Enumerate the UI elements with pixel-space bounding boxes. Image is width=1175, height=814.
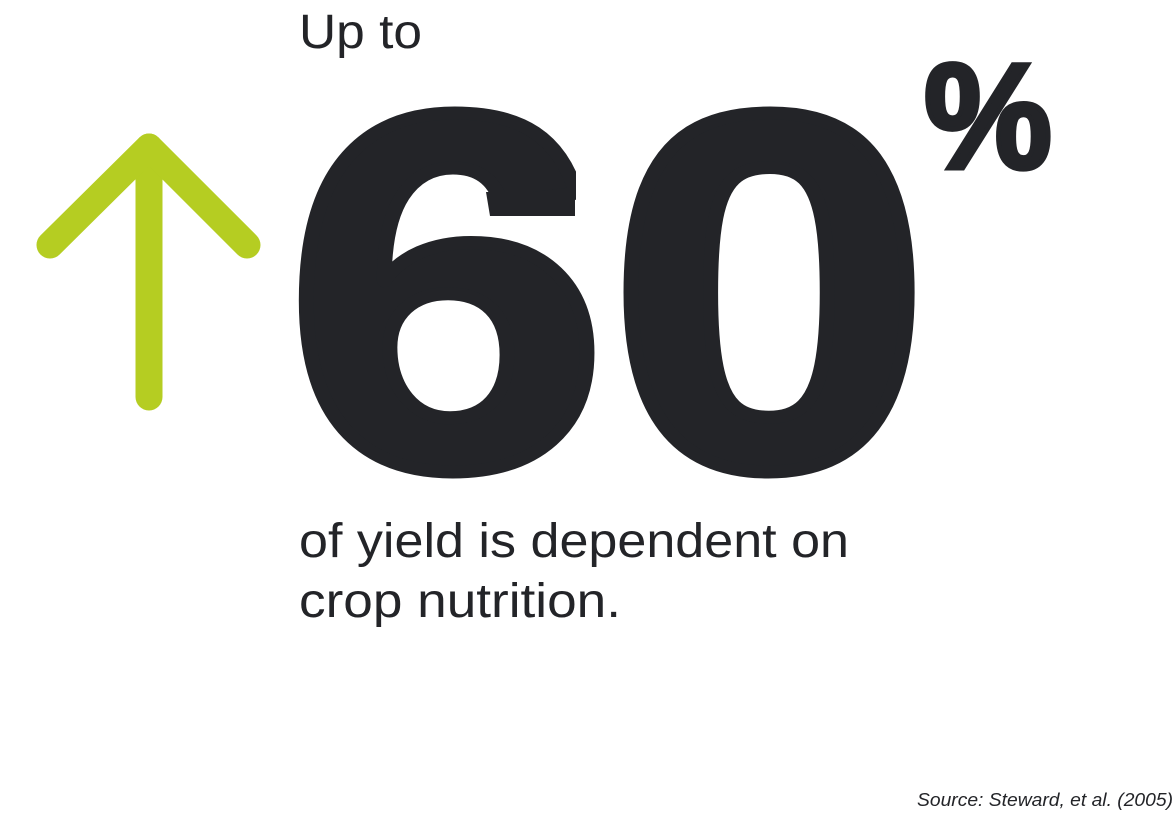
percent sign: %: [924, 32, 1052, 200]
source citation: Source: Steward, et al. (2005): [917, 790, 1173, 810]
description text: [299, 515, 849, 628]
icon: upward arrow: [50, 147, 247, 397]
description text: of yield is dependent on: [299, 515, 849, 568]
heading: up to: Up to: [299, 6, 422, 59]
description text: crop nutrition.: [299, 575, 621, 628]
big number: 60: 60: [285, 9, 931, 575]
